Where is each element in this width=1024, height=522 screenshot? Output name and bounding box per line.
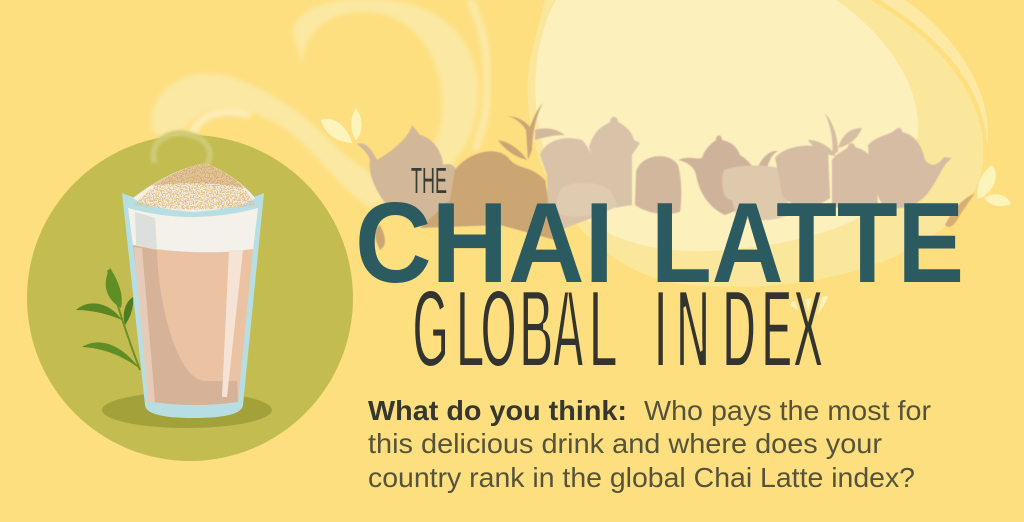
title: chai latte: CHAI: [355, 180, 614, 307]
cup: [722, 165, 788, 220]
question text: What do you think:: [368, 395, 627, 426]
question text: country rank in the global Chai Latte index?: [368, 462, 915, 493]
right tea leaves: [808, 113, 862, 156]
row of pots: [540, 117, 681, 230]
left teapot: [357, 125, 459, 225]
cup illustration: [27, 133, 353, 461]
centre teapot: [678, 136, 778, 215]
steam cloud background: [151, 0, 988, 287]
teapot silhouettes: [357, 103, 975, 250]
right pots: [775, 128, 952, 211]
title: global index: [412, 265, 824, 393]
foam layer: [128, 208, 258, 252]
brown pot and leaves: [375, 103, 555, 250]
glass highlights: [135, 212, 157, 250]
tea liquid: [133, 245, 253, 405]
pale tea leaves: [321, 108, 1011, 322]
title: global index: GLOBAL: [412, 265, 618, 393]
title: chai latte: [355, 180, 964, 307]
steam ring above glass: [153, 133, 210, 165]
question text: [368, 395, 931, 493]
liquid shadow: [133, 245, 238, 405]
foam top with cinnamon: [133, 163, 255, 212]
green circle: [27, 135, 353, 461]
title: global index: INDEX: [654, 265, 824, 393]
question text: Who pays the most for: [644, 395, 931, 426]
question text: this delicious drink and where does your: [368, 428, 882, 459]
tea sprig: [76, 268, 140, 370]
glass body: [122, 193, 264, 418]
title: chai latte: LATTE: [651, 180, 964, 307]
title: the: THE: [411, 160, 447, 201]
ground shadow: [102, 392, 272, 428]
